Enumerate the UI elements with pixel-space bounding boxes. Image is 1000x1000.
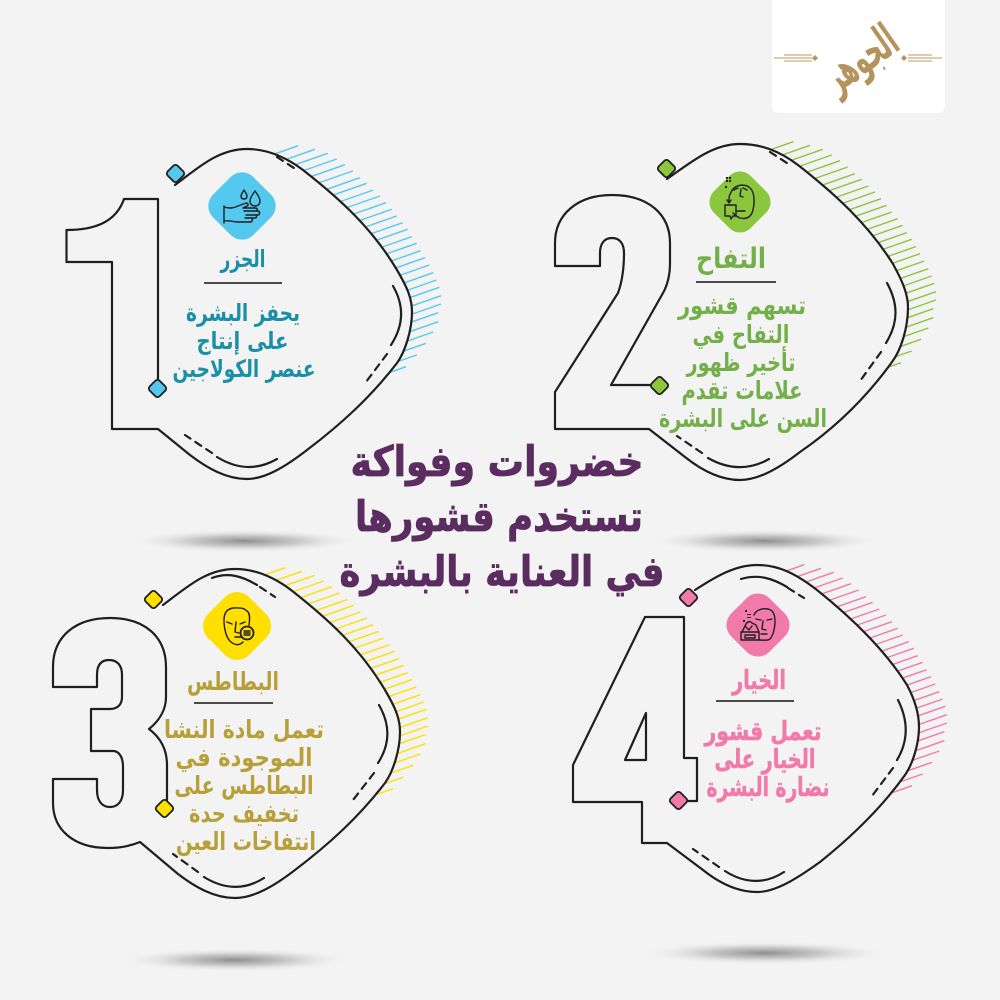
body text 4: نضارة البشرة	[706, 773, 830, 803]
logo	[772, 0, 945, 113]
number 3 and blob outline	[53, 569, 400, 898]
icon badge: face and mirror	[703, 165, 777, 239]
shadow under panel 2	[647, 529, 883, 553]
marker top 1	[166, 164, 185, 183]
marker bottom 2	[650, 376, 669, 395]
number 1 and blob outline	[66, 149, 412, 479]
body text 2: السن على البشرة	[659, 404, 827, 434]
body text 4: الخيار على	[714, 745, 816, 775]
body text 2: علامات تقدم	[682, 376, 802, 405]
body text 1: يحفز البشرة	[186, 299, 300, 327]
title: في العناية بالبشرة	[340, 547, 664, 597]
inner accents 3	[173, 575, 388, 887]
marker top 3	[144, 590, 163, 609]
icon badge: face with patch	[196, 585, 278, 667]
title: تستخدم قشورها	[355, 492, 643, 542]
body text 2: التفاح في	[692, 320, 790, 349]
heading rule 1	[204, 282, 282, 284]
shadow under panel 1	[127, 529, 363, 553]
body text 3	[164, 715, 324, 857]
marker top 2	[657, 159, 676, 178]
title	[340, 437, 664, 597]
panel 4: cucumber	[573, 565, 947, 892]
inner accents 1	[185, 157, 401, 467]
body text 3: انتفاخات العين	[176, 827, 316, 857]
body text 3: البطاطس على	[174, 771, 314, 800]
number 2 and blob outline	[555, 144, 908, 480]
body text 1: على إنتاج	[196, 327, 288, 355]
marker top 4	[679, 588, 698, 607]
marker bottom 3	[155, 799, 174, 818]
heading rule 4	[716, 700, 794, 702]
icon badge: face and cream jar	[720, 587, 796, 663]
body text 4: تعمل قشور	[703, 717, 822, 747]
inner accents 2	[677, 152, 896, 467]
inner accents 4	[693, 577, 906, 881]
heading rule 2	[696, 281, 776, 283]
body text 3: تخفيف حدة	[189, 799, 299, 828]
marker bottom 1	[148, 379, 167, 398]
body text 3: تعمل مادة النشا	[164, 715, 324, 744]
body text 3: الموجودة في	[176, 743, 312, 773]
body text 4	[703, 717, 830, 803]
body text 1	[172, 299, 316, 383]
body text 2: تسهم قشور	[676, 291, 806, 321]
icon badge: hand and drops	[202, 166, 282, 246]
number 4 and blob outline	[573, 565, 919, 892]
heading 2: التفاح	[696, 242, 766, 275]
panel 1: carrot	[66, 146, 441, 479]
panel 3: potato	[53, 568, 428, 898]
heading rule 3	[194, 702, 273, 704]
body text 1: عنصر الكولاجين	[172, 355, 316, 383]
title: خضروات وفواكة	[350, 437, 644, 487]
marker bottom 4	[669, 791, 688, 810]
body text 2: تأخير ظهور	[685, 346, 796, 378]
panel 2: apple	[555, 142, 936, 480]
heading 1: الجزر	[220, 245, 266, 273]
body text 2	[659, 291, 827, 434]
shadow under panel 3	[117, 948, 353, 972]
shadow under panel 4	[639, 941, 891, 965]
heading 4: الخيار	[731, 666, 786, 696]
heading 3: البطاطس	[187, 667, 279, 696]
